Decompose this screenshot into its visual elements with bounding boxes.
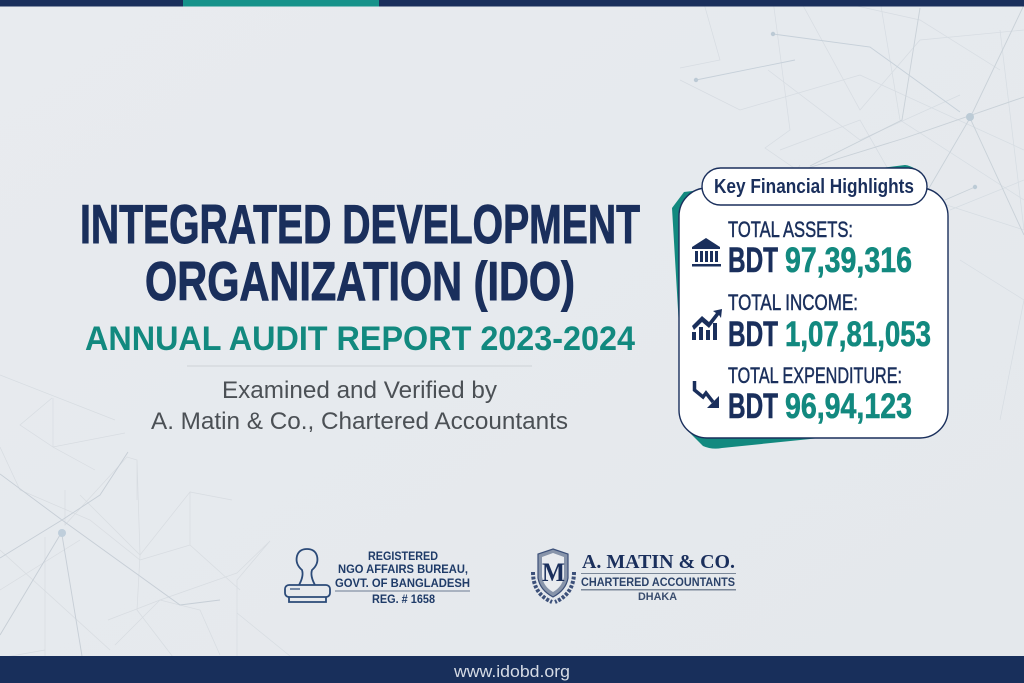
metric: total expenditure: BDT bbox=[728, 387, 778, 426]
auditor text: CHARTERED ACCOUNTANTS bbox=[581, 575, 735, 589]
registration block bbox=[285, 549, 470, 606]
metric: total assets bbox=[692, 217, 912, 280]
verified by text bbox=[151, 377, 568, 435]
footer bar bbox=[0, 656, 1024, 683]
auditor text bbox=[581, 551, 736, 603]
metric: total income: 1,07,81,053 bbox=[785, 315, 931, 354]
network pattern: bottom left bbox=[0, 375, 290, 658]
panel: key financial highlights bbox=[672, 165, 948, 449]
auditor text: DHAKA bbox=[638, 591, 677, 603]
registration text: REGISTERED bbox=[368, 551, 438, 563]
metric: total income: BDT bbox=[728, 315, 778, 354]
auditor text: A. MATIN & CO. bbox=[582, 551, 735, 573]
icon: bank bbox=[692, 238, 721, 266]
icon: rubber stamp bbox=[285, 549, 330, 602]
icon: falling arrow bbox=[694, 381, 719, 408]
metric: total assets: TOTAL ASSETS: bbox=[728, 217, 853, 242]
heading pill: Key Financial Highlights bbox=[714, 176, 914, 198]
title: INTEGRATED DEVELOPMENT bbox=[80, 193, 640, 255]
top bar bbox=[0, 0, 1024, 6]
footer bar: www.idobd.org bbox=[453, 662, 570, 681]
subtitle: ANNUAL AUDIT REPORT 2023-2024 bbox=[85, 320, 635, 358]
icon: shield with M and laurels: M bbox=[542, 558, 565, 587]
teal backing shape bbox=[672, 165, 940, 449]
metric: total assets: 97,39,316 bbox=[785, 241, 912, 280]
metric: total income: TOTAL INCOME: bbox=[728, 290, 858, 315]
icon: rising chart bbox=[692, 309, 722, 340]
title bbox=[80, 193, 640, 312]
metric: total expenditure bbox=[694, 363, 912, 426]
card bbox=[679, 188, 948, 438]
verified by text: A. Matin & Co., Chartered Accountants bbox=[151, 408, 568, 435]
registration text: NGO AFFAIRS BUREAU, bbox=[338, 564, 468, 576]
metric: total expenditure: 96,94,123 bbox=[785, 387, 912, 426]
network pattern: top right bbox=[680, 0, 1024, 420]
metric: total income bbox=[692, 290, 931, 354]
title: ORGANIZATION (IDO) bbox=[145, 250, 575, 312]
registration text: REG. # 1658 bbox=[372, 594, 436, 606]
icon: shield with M and laurels bbox=[533, 549, 574, 602]
registration text bbox=[335, 551, 470, 606]
registration text: GOVT. OF BANGLADESH bbox=[335, 578, 470, 590]
auditor block bbox=[533, 549, 736, 603]
metric: total expenditure: TOTAL EXPENDITURE: bbox=[728, 363, 902, 388]
heading pill bbox=[702, 168, 927, 205]
metric: total assets: BDT bbox=[728, 241, 778, 280]
divider bbox=[187, 366, 532, 367]
verified by text: Examined and Verified by bbox=[222, 377, 497, 404]
